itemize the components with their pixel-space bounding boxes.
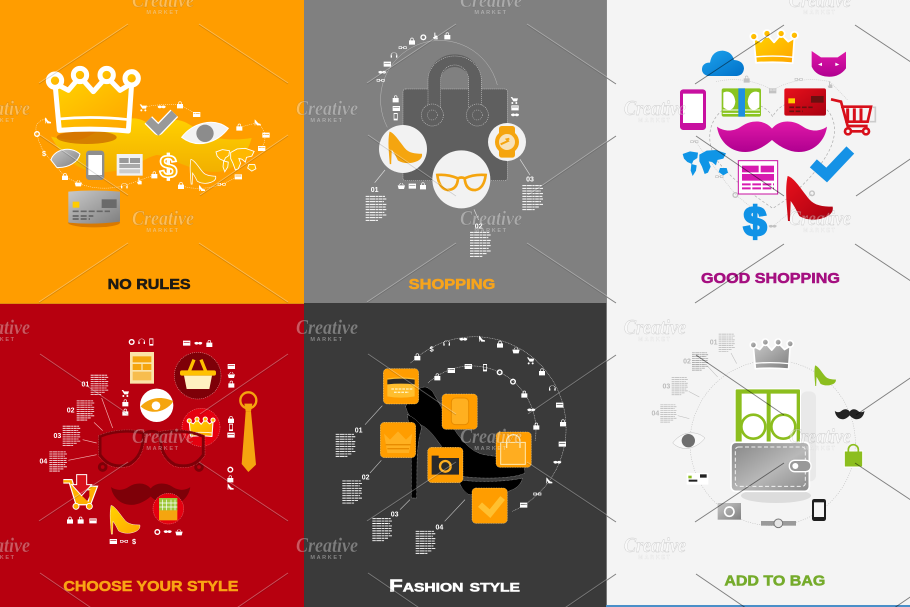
label 03: 03 bbox=[53, 433, 61, 440]
watermark: creative market: MARKET bbox=[310, 337, 344, 343]
icon: world map outline bbox=[216, 148, 256, 172]
circle: basket bbox=[174, 352, 221, 399]
icon: black smartphone bbox=[812, 499, 826, 521]
dotted orbit ring bbox=[690, 360, 855, 526]
icon: cart with arrow bbox=[63, 475, 95, 509]
icon: magenta moustache bbox=[717, 122, 827, 152]
small white icons bbox=[414, 336, 566, 508]
small white icons bbox=[34, 101, 270, 191]
label 01: 01 bbox=[355, 427, 363, 434]
watermark: creative market: MARKET bbox=[803, 228, 837, 234]
label 04: 04 bbox=[39, 459, 47, 466]
title: choose your style: CHOOSE YOUR STYLE bbox=[63, 579, 239, 595]
yellow moustache bbox=[51, 118, 252, 172]
label 01: 01 bbox=[81, 382, 89, 389]
label 01: 01 bbox=[371, 187, 379, 194]
watermark: creative market: Creative bbox=[296, 533, 358, 557]
tile: check mark bbox=[472, 488, 507, 523]
circle: glasses bbox=[432, 150, 490, 208]
icon: banknotes bbox=[722, 88, 761, 117]
dashed heart outline bbox=[710, 101, 835, 208]
watermark: creative market: Creative bbox=[624, 315, 686, 339]
watermark: creative market: Creative bbox=[624, 533, 686, 557]
label 04 bbox=[39, 452, 67, 471]
small white icons bbox=[377, 32, 519, 189]
left edge bbox=[606, 0, 607, 303]
label 01 bbox=[710, 334, 735, 351]
icon: check mark bbox=[148, 113, 174, 130]
label 03 bbox=[53, 426, 80, 445]
panel: good shopping bbox=[606, 0, 910, 303]
icon: dollar sign: $ bbox=[159, 148, 177, 184]
icon: cat mask bbox=[812, 51, 846, 77]
label 02: 02 bbox=[475, 224, 483, 231]
small grey icons bbox=[690, 76, 832, 228]
handbag silhouette bbox=[403, 56, 507, 181]
label 02: 02 bbox=[362, 474, 370, 481]
watermark: creative market: MARKET bbox=[474, 446, 508, 452]
watermark: creative market: MARKET bbox=[310, 118, 344, 124]
icon: heel outline bbox=[190, 159, 216, 184]
label 04: 04 bbox=[435, 524, 443, 531]
left edge bbox=[606, 303, 607, 607]
label 02 bbox=[683, 353, 708, 370]
small white icons: $ bbox=[42, 149, 46, 158]
watermark: creative market: Creative bbox=[789, 424, 851, 448]
title: no rules: NO RULES bbox=[108, 277, 191, 293]
icon: web page bbox=[117, 154, 143, 176]
watermark: creative market: MARKET bbox=[310, 555, 344, 561]
icon: black moustache bbox=[835, 409, 865, 419]
crown shadow bbox=[57, 131, 117, 144]
icon: yellow heel bbox=[110, 505, 140, 534]
icon: banknotes bbox=[736, 389, 800, 446]
circle: slot machine bbox=[153, 493, 184, 524]
icon: shopping cart bbox=[831, 99, 875, 134]
label 03 bbox=[522, 177, 543, 210]
watermark: creative market: MARKET bbox=[474, 228, 508, 234]
tile: credit card bbox=[383, 369, 419, 404]
icon: eye bbox=[182, 122, 228, 144]
title: add to bag: ADD TO BAG bbox=[724, 573, 825, 589]
title: good shopping: GOOD SHOPPING bbox=[701, 271, 840, 287]
label 03: 03 bbox=[391, 512, 399, 519]
small white icons: $ bbox=[132, 537, 136, 546]
small white icons bbox=[67, 338, 235, 546]
icon: wristwatch bbox=[761, 519, 796, 528]
icon: cloud bbox=[702, 51, 744, 76]
dotted connector ring bbox=[694, 80, 848, 227]
icon: smartphone bbox=[680, 89, 706, 130]
icon: wallet bbox=[731, 442, 811, 491]
tile: smartphone bbox=[442, 394, 477, 429]
label 03 bbox=[662, 377, 688, 395]
label 02: 02 bbox=[67, 407, 75, 414]
circle: watch bbox=[488, 123, 526, 161]
wallet shadow bbox=[741, 391, 816, 503]
icon: web page bbox=[738, 161, 778, 194]
label 02: 02 bbox=[683, 358, 691, 365]
tile: crown bbox=[380, 422, 416, 458]
watermark: creative market: MARKET bbox=[146, 228, 180, 234]
icon: tie bbox=[240, 392, 256, 472]
watermark: creative market: Creative bbox=[296, 96, 358, 120]
icon: dollar sign: $ bbox=[743, 198, 767, 245]
label 01 bbox=[336, 427, 363, 456]
icon: glasses bbox=[98, 430, 205, 470]
bottom edge bbox=[606, 605, 910, 607]
leader lines bbox=[68, 398, 113, 460]
watermark: creative market: MARKET bbox=[146, 446, 180, 452]
label 01 bbox=[81, 375, 108, 394]
icon: smartphone bbox=[86, 151, 104, 180]
label 03: 03 bbox=[526, 177, 534, 184]
watermark: creative market: Creative bbox=[132, 424, 194, 448]
watermark: creative market: Creative bbox=[460, 206, 522, 230]
small white icons: $ bbox=[430, 344, 434, 353]
watermark: creative market: Creative bbox=[132, 206, 194, 230]
label 04 bbox=[416, 524, 443, 553]
icon: green heel bbox=[814, 365, 836, 386]
watermark: creative market: Creative bbox=[789, 206, 851, 230]
top edge bbox=[0, 303, 304, 304]
title: fashion style: Fashion style bbox=[389, 576, 520, 596]
watermark: creative market: MARKET bbox=[146, 10, 180, 16]
watermark: creative market: Creative bbox=[296, 315, 358, 339]
tile: camera bbox=[428, 447, 463, 483]
icon: camera bbox=[718, 503, 741, 520]
watermark: creative market: MARKET bbox=[803, 446, 837, 452]
panel: choose your style bbox=[0, 303, 304, 607]
watermark: creative market: Creative bbox=[624, 96, 686, 120]
watermark: creative market: MARKET bbox=[638, 555, 672, 561]
icon: dark moustache bbox=[111, 484, 190, 505]
label 01: 01 bbox=[710, 339, 718, 346]
panel: shopping bbox=[304, 0, 607, 303]
dotted orbit arcs bbox=[411, 337, 566, 511]
watermark: creative market: MARKET bbox=[638, 118, 672, 124]
icon: speech bowl bbox=[51, 149, 80, 167]
icon: business card bbox=[687, 473, 708, 485]
watermark: creative market: MARKET bbox=[803, 10, 837, 16]
label 02 bbox=[67, 401, 94, 420]
title: shopping: SHOPPING bbox=[409, 277, 495, 293]
label 04: 04 bbox=[651, 410, 659, 417]
label 01 bbox=[366, 187, 386, 220]
panel: fashion style bbox=[304, 303, 607, 607]
circle: eye bbox=[140, 389, 173, 422]
label 02 bbox=[470, 224, 491, 256]
big black high heel bbox=[406, 387, 525, 498]
label 03 bbox=[372, 512, 399, 541]
icon: crown bbox=[48, 68, 138, 131]
icon: green bag bbox=[844, 445, 863, 467]
icon: world map bbox=[683, 150, 728, 176]
circle: shoe bbox=[379, 125, 427, 173]
icon: red heel bbox=[786, 176, 833, 221]
icon: grey crown bbox=[750, 339, 793, 369]
icon: blue check mark bbox=[813, 150, 850, 175]
icon: eye bbox=[673, 433, 705, 448]
watermark: creative market: Creative bbox=[460, 424, 522, 448]
dotted orbit arc bbox=[381, 40, 497, 127]
tile: shopping bag bbox=[496, 432, 531, 467]
label 03: 03 bbox=[662, 383, 670, 390]
panel: no rules bbox=[0, 0, 304, 303]
label 02 bbox=[342, 474, 370, 503]
dotted connector paths bbox=[36, 105, 265, 188]
watermark: creative market: MARKET bbox=[638, 337, 672, 343]
leader lines bbox=[678, 353, 737, 419]
icon: credit card bbox=[68, 190, 120, 227]
watermark: creative market: MARKET bbox=[474, 10, 508, 16]
panel: add to bag bbox=[606, 303, 910, 607]
icon: yellow crown bbox=[750, 30, 798, 63]
label 04 bbox=[651, 405, 676, 422]
leader lines bbox=[375, 159, 530, 220]
leader lines bbox=[365, 406, 465, 521]
circle: crown bbox=[182, 408, 220, 446]
icon: web page bbox=[130, 352, 154, 384]
icon: credit card bbox=[784, 88, 826, 116]
